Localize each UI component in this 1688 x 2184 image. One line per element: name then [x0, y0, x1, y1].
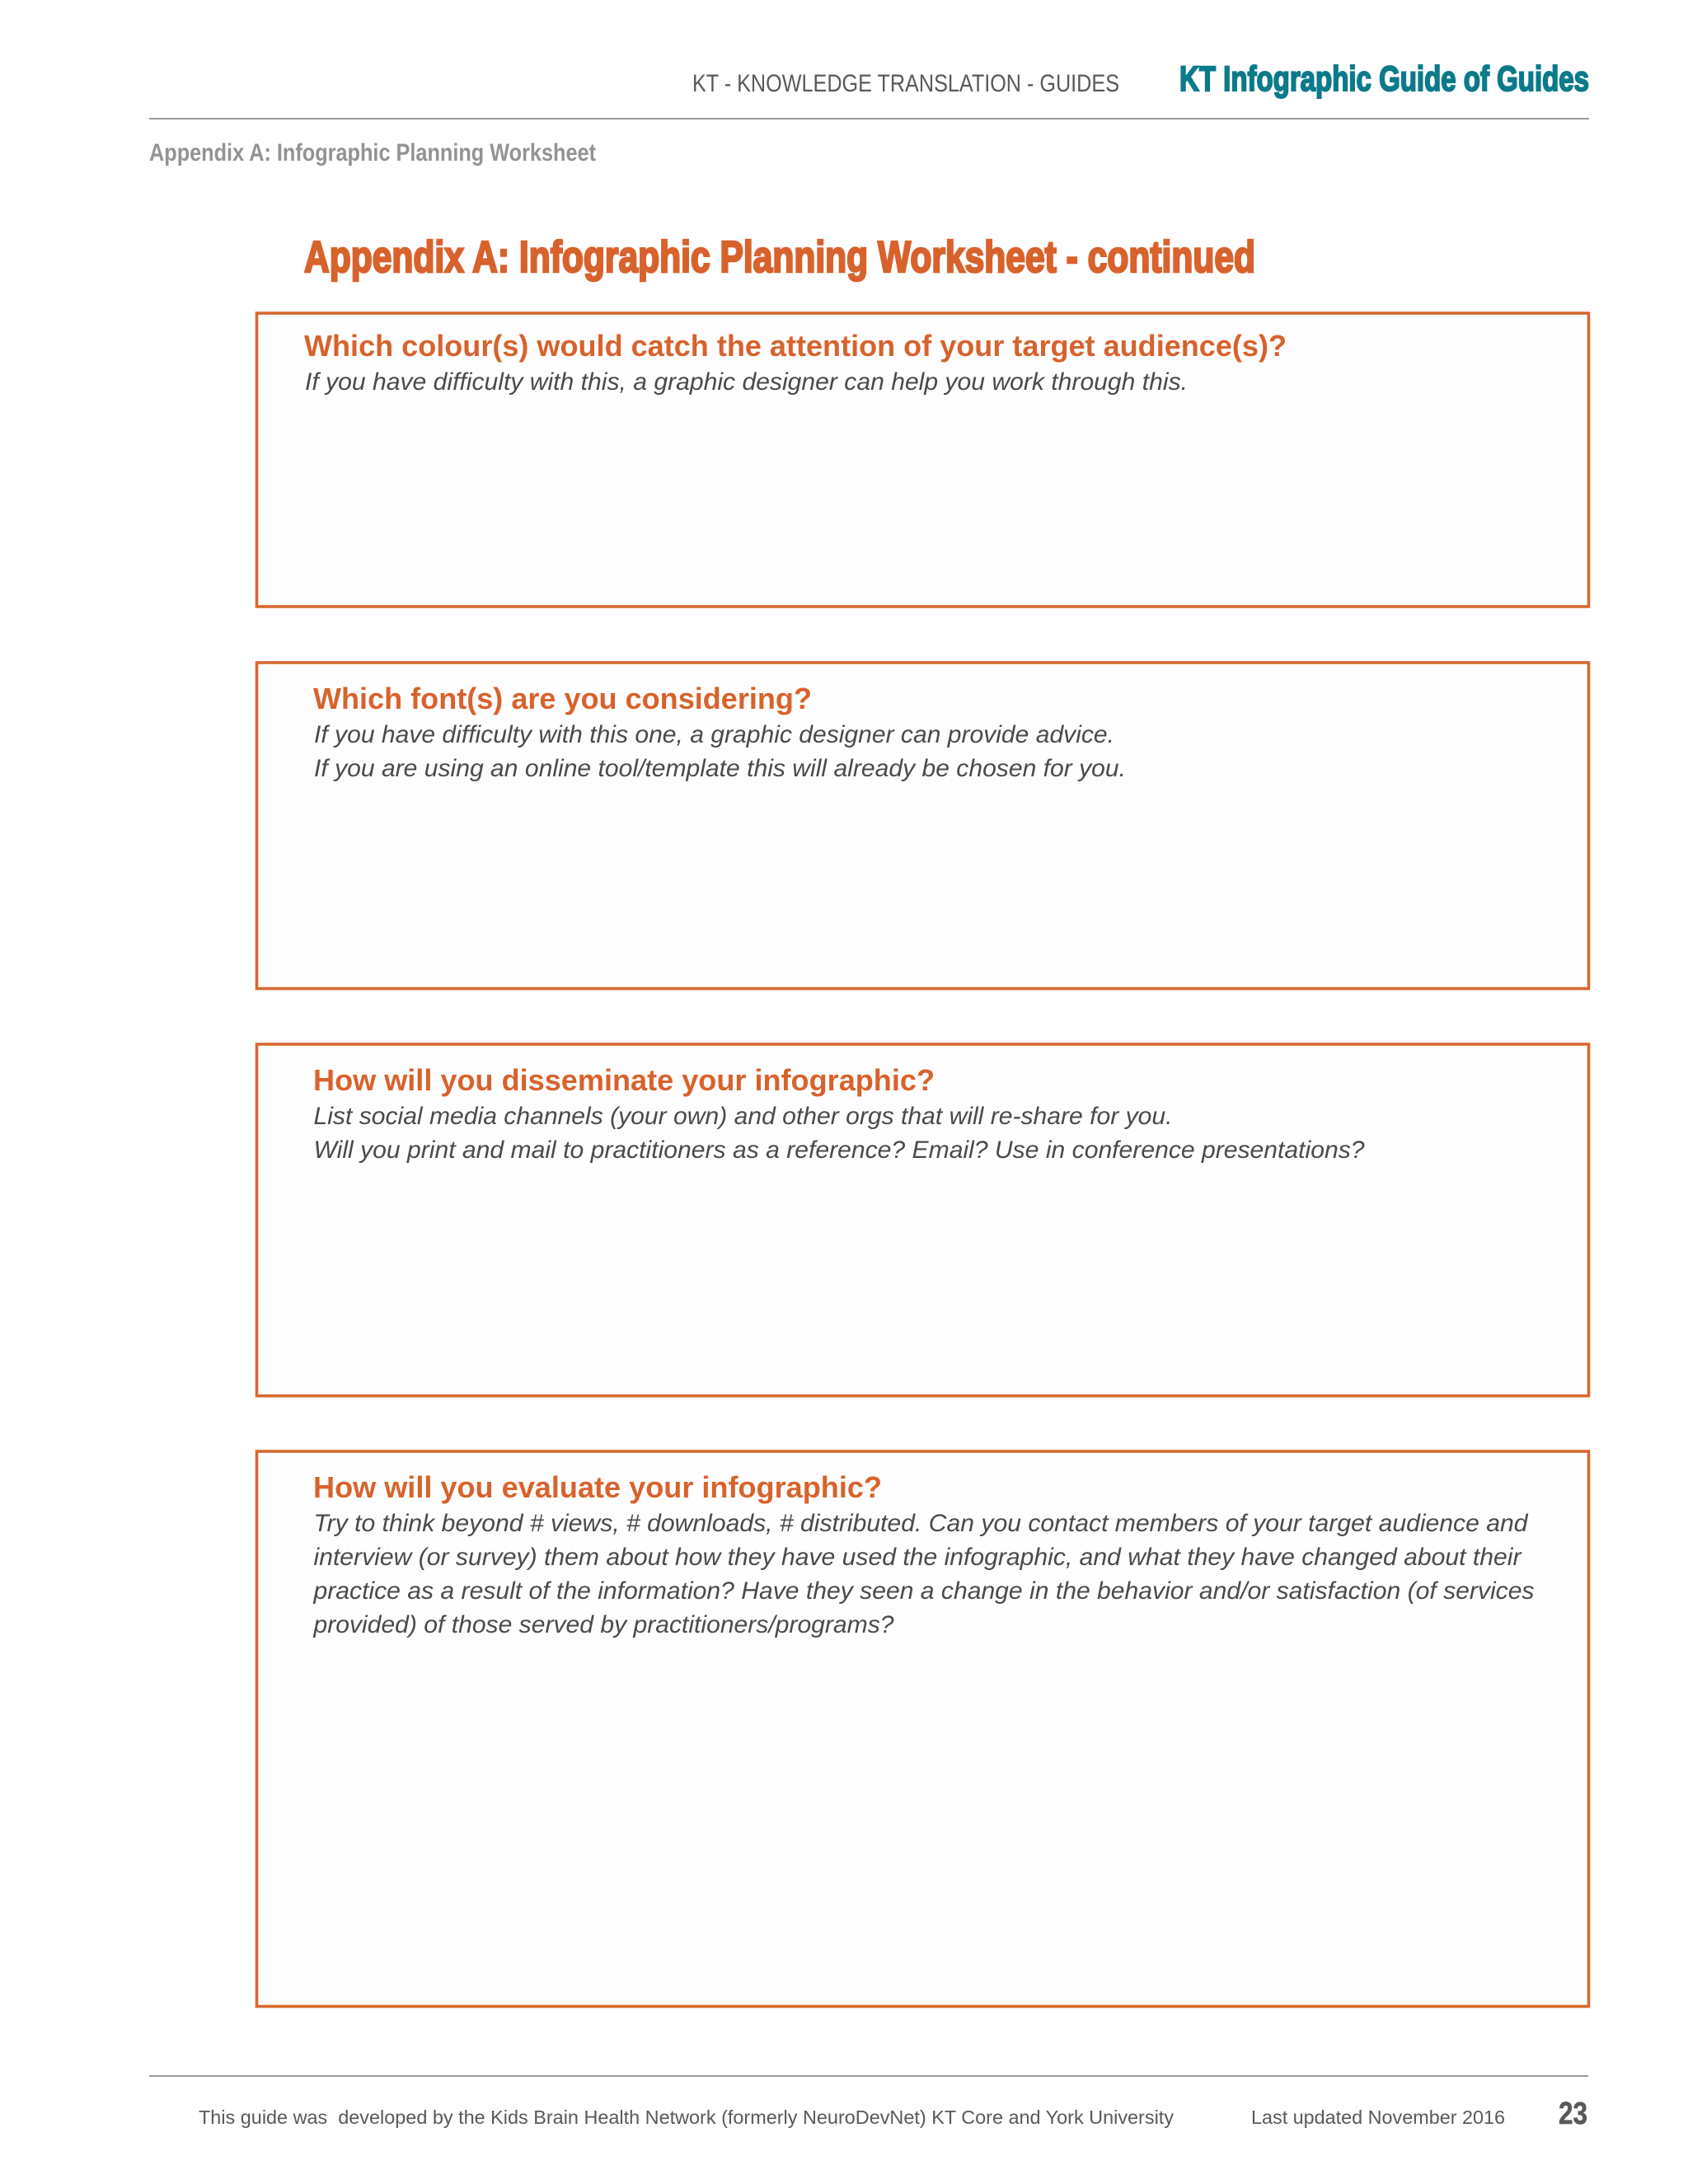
dissemination prompt: List social media channels (your own) and other orgs that will re-share for you.: [313, 1103, 1172, 1130]
fonts prompt: If you have difficulty with this one, a graphic designer can provide advice.: [314, 721, 1114, 748]
evaluation prompt: [312, 1510, 1535, 1638]
evaluation prompt: provided) of those served by practitioners/programs?: [312, 1611, 894, 1638]
page header: [149, 59, 1589, 166]
section label: Appendix A: Infographic Planning Worksheet: [149, 139, 596, 166]
dissemination prompt: Will you print and mail to practitioners as a reference? Email? Use in conference presentations?: [313, 1137, 1365, 1164]
evaluation heading: How will you evaluate your infographic?: [313, 1470, 882, 1504]
page footer: [149, 2075, 1588, 2131]
main heading: Appendix A: Infographic Planning Worksheet - continued: [304, 232, 1255, 282]
evaluation prompt: practice as a result of the information? Have they seen a change in the behavior and/or satisfaction (of services: [312, 1577, 1535, 1605]
panel: dissemination: [257, 1044, 1589, 1396]
panel: colours: [257, 313, 1589, 607]
panel: fonts: [257, 663, 1589, 989]
footer date: Last updated November 2016: [1251, 2107, 1505, 2128]
fonts heading: Which font(s) are you considering?: [313, 682, 812, 715]
footer credit: This guide was developed by the Kids Brain Health Network (formerly NeuroDevNet) KT Core and York University: [199, 2107, 1175, 2128]
evaluation prompt: Try to think beyond # views, # downloads, # distributed. Can you contact members of your target audience and: [313, 1510, 1529, 1537]
dissemination prompt: [313, 1103, 1365, 1164]
fonts prompt: If you are using an online tool/template this will already be chosen for you.: [314, 755, 1126, 782]
dissemination heading: How will you disseminate your infographic?: [313, 1063, 935, 1097]
panel: evaluation: [257, 1451, 1589, 2006]
colours prompt: If you have difficulty with this, a graphic designer can help you work through this.: [305, 368, 1188, 396]
colours heading: Which colour(s) would catch the attention of your target audience(s)?: [304, 329, 1287, 363]
evaluation prompt: interview (or survey) them about how they have used the infographic, and what they have changed about their: [313, 1544, 1522, 1571]
page number: 23: [1559, 2097, 1587, 2131]
fonts prompt: [314, 721, 1126, 782]
header label: KT - KNOWLEDGE TRANSLATION - GUIDES: [692, 70, 1119, 97]
